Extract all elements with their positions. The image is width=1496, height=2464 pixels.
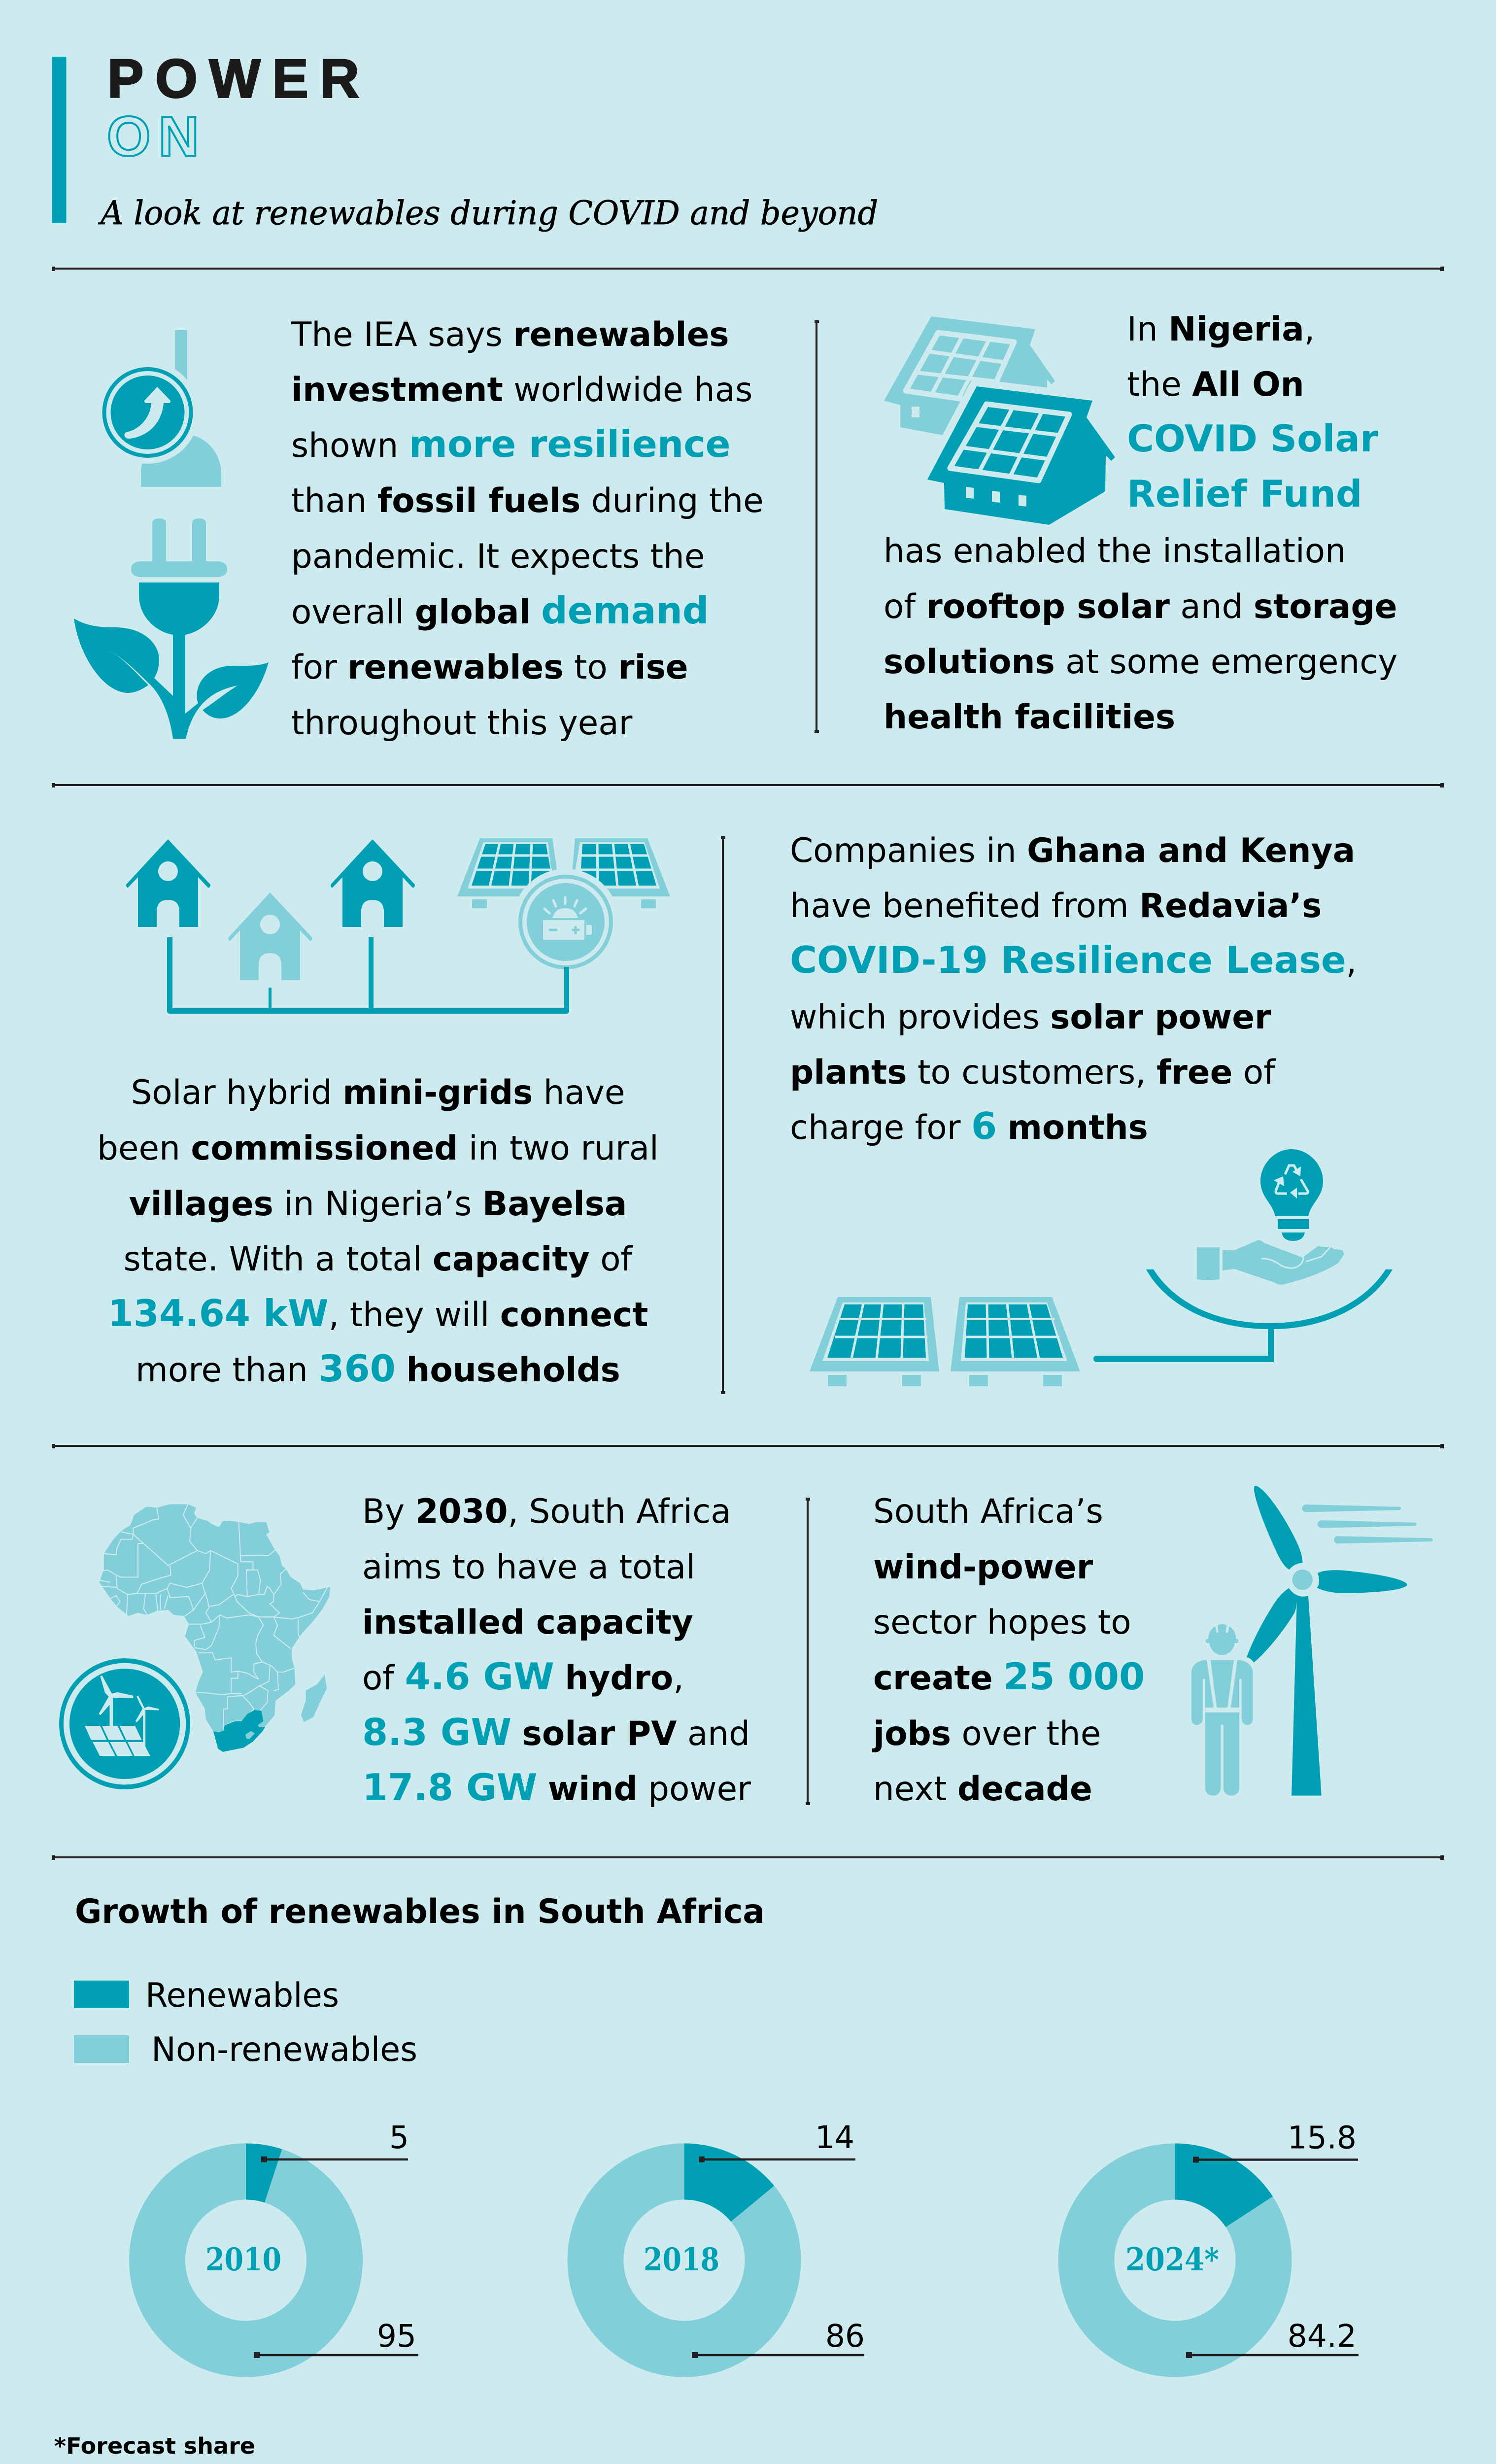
text: Redavia lease: have benefited from Redavia’s	[790, 886, 1322, 925]
text: IEA investment: pandemic. It expects the	[291, 537, 705, 576]
text: wind jobs: jobs over the	[872, 1714, 1101, 1753]
text: Redavia lease: COVID-19 Resilience Lease,	[790, 938, 1357, 982]
text: Nigeria fund: COVID Solar	[1127, 417, 1378, 460]
title accent bar	[52, 57, 66, 223]
legend	[74, 1976, 417, 2069]
icon: open hand	[1197, 1240, 1344, 1285]
panel: growth of renewables in South Africa	[74, 1892, 1359, 2377]
text: Nigeria fund: solutions at some emergency	[884, 642, 1397, 681]
icon: light bulb with recycle symbol	[1260, 1149, 1323, 1241]
icon: Africa map with South Africa highlighted	[61, 1504, 330, 1787]
donut chart: 2024 forecast: 15.8	[1288, 2120, 1357, 2156]
text: Nigeria fund	[884, 309, 1397, 736]
panel: IEA renewables investment	[74, 315, 764, 742]
text: mini-grids: 134.64 kW, they will connect	[108, 1292, 648, 1335]
title: ON outlined: ON	[107, 105, 199, 168]
text: mini-grids	[97, 1073, 659, 1390]
text: Nigeria fund: the All On	[1127, 365, 1304, 404]
text: IEA investment: than fossil fuels during the	[291, 481, 764, 520]
icon: right solar panel	[951, 1297, 1080, 1386]
text: Nigeria fund: has enabled the installation	[884, 531, 1346, 570]
donut chart: 2010: 5	[389, 2120, 409, 2156]
donut chart: 2018: 86	[825, 2318, 865, 2354]
text: IEA investment: The IEA says renewables	[291, 315, 729, 354]
title block	[52, 48, 878, 232]
text: Nigeria fund: of rooftop solar and storage	[884, 587, 1397, 626]
title: POWER: POWER	[107, 48, 359, 109]
chart heading: Growth of renewables in South Africa	[75, 1892, 765, 1931]
subtitle: A look at renewables during COVID and beyond	[98, 194, 878, 232]
text: IEA investment: for renewables to rise	[291, 648, 688, 686]
text: Redavia lease: plants to customers, free of	[790, 1053, 1276, 1092]
text: wind jobs: South Africa’s	[873, 1492, 1103, 1531]
text: Nigeria fund: In Nigeria,	[1127, 309, 1315, 348]
text: South Africa 2030: By 2030, South Africa	[362, 1492, 731, 1531]
text: South Africa 2030: of 4.6 GW hydro,	[362, 1655, 684, 1698]
panel: wind-power jobs	[872, 1486, 1433, 1808]
legend: Renewables	[145, 1976, 339, 2015]
text: wind jobs	[872, 1492, 1145, 1808]
donut chart: 2018: 2018	[644, 2241, 719, 2278]
text: wind jobs: sector hopes to	[873, 1603, 1131, 1642]
icon: growth arrow and plug with leaves	[74, 330, 269, 739]
text: South Africa 2030: aims to have a total	[362, 1547, 695, 1586]
icon: houses with rooftop solar	[884, 316, 1115, 525]
legend: Non-renewables	[151, 2030, 417, 2069]
text: mini-grids: more than 360 households	[136, 1347, 620, 1390]
donut chart: 2024 forecast: 2024*	[1125, 2241, 1219, 2278]
text: wind jobs: wind-power	[873, 1547, 1093, 1586]
text: mini-grids: Solar hybrid mini-grids have	[131, 1073, 625, 1112]
panel: solar hybrid mini-grids	[97, 838, 670, 1390]
icon: turbine	[1247, 1486, 1407, 1796]
text: South Africa 2030: 17.8 GW wind power	[362, 1766, 751, 1809]
panel: South Africa 2030 capacity	[61, 1492, 751, 1809]
text: wind jobs: next decade	[873, 1769, 1092, 1808]
donut chart: 2010: 2010	[205, 2241, 281, 2278]
text: IEA investment: investment worldwide has	[291, 370, 752, 409]
text: South Africa 2030	[362, 1492, 751, 1809]
text: Redavia lease: charge for 6 months	[790, 1104, 1148, 1148]
map: Lesotho	[245, 1731, 255, 1739]
icon: cupped bowl and cable	[1093, 1269, 1393, 1362]
icon: solar panels	[457, 838, 670, 908]
text: wind jobs: create 25 000	[873, 1655, 1145, 1698]
text: IEA investment: shown more resilience	[291, 422, 731, 466]
donut chart: 2018	[568, 2120, 865, 2377]
donut chart: 2010: 95	[377, 2318, 416, 2354]
text: IEA investment: overall global demand	[291, 589, 709, 632]
text: IEA investment	[291, 315, 764, 742]
icon: solar panels, hand and bulb	[810, 1149, 1393, 1386]
icon: wind turbine and worker	[1191, 1486, 1433, 1796]
icon: house light centre	[228, 892, 312, 980]
panel: Redavia COVID-19 Resilience Lease	[790, 831, 1393, 1386]
footnote: forecast share: *Forecast share	[54, 2433, 255, 2459]
text: South Africa 2030: 8.3 GW solar PV and	[362, 1711, 750, 1754]
text: Redavia lease: which provides solar power	[790, 997, 1271, 1036]
text: Nigeria fund: Relief Fund	[1127, 472, 1362, 515]
icon: wind and solar medallion	[61, 1661, 188, 1787]
icon: battery medallion	[512, 869, 619, 975]
text: IEA investment: throughout this year	[291, 703, 633, 742]
text: Redavia lease	[790, 831, 1357, 1148]
donut chart: 2024 forecast	[1058, 2120, 1359, 2377]
icon: worker	[1191, 1624, 1253, 1796]
donut chart: 2024 forecast: 84.2	[1288, 2318, 1357, 2354]
grid connection lines	[167, 937, 569, 1014]
text: Redavia lease: Companies in Ghana and Kenya	[790, 831, 1355, 870]
text: South Africa 2030: installed capacity	[362, 1603, 693, 1642]
icon: wind lines	[1302, 1505, 1433, 1543]
icon: left solar panel	[810, 1297, 939, 1386]
map: South Africa	[213, 1710, 265, 1752]
panel: Nigeria COVID Solar Relief Fund	[884, 309, 1397, 736]
text: mini-grids: villages in Nigeria’s Bayelsa	[129, 1184, 627, 1223]
text: mini-grids: state. With a total capacity of	[124, 1239, 634, 1278]
icon: house dark left	[126, 839, 210, 927]
text: Nigeria fund: health facilities	[884, 697, 1175, 736]
donut chart: 2010	[129, 2120, 418, 2377]
text: mini-grids: been commissioned in two rural	[97, 1129, 659, 1167]
map: Madagascar	[301, 1675, 327, 1722]
icon: house dark right	[331, 839, 415, 927]
icon: houses connected to solar mini-grid	[126, 838, 670, 1014]
map: African continent	[99, 1504, 330, 1752]
donut chart: 2018: 14	[815, 2120, 854, 2156]
